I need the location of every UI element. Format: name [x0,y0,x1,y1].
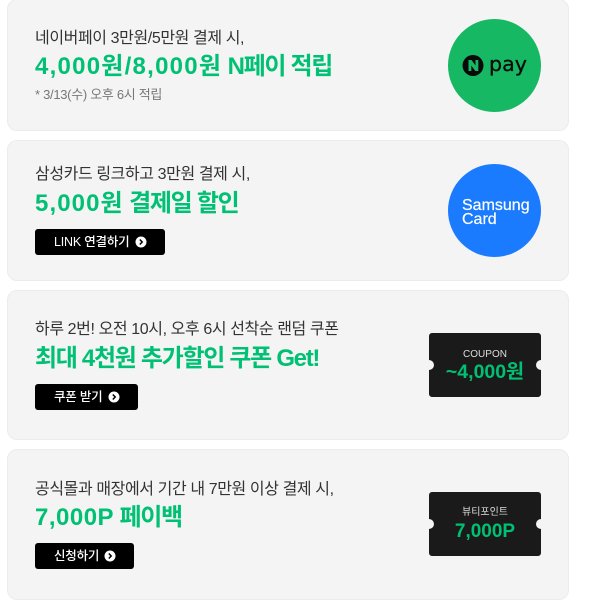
button: LINK connect: LINK 연결하기 [54,235,129,249]
icon: Samsung Card badge [448,164,541,257]
panel: Naver Pay card [7,0,569,131]
lead text: coupon condition: 하루 2번! 오전 10시, 오후 6시 선착순 랜덤 쿠폰 [35,321,339,338]
icon: coupon ticket [429,333,541,397]
icon: N pay badge: pay [489,52,527,76]
icon: Samsung Card badge: Samsung [462,197,530,214]
heading: payback reward: 7,000P 페이백 [35,504,182,531]
icon: beauty point ticket [429,492,541,556]
lead text: Samsung Card condition: 삼성카드 링크하고 3만원 결제 시, [35,166,250,183]
icon: coupon ticket: COUPON [463,349,507,360]
icon: Samsung Card badge: Card [462,211,497,228]
icon: beauty point ticket: 7,000P [455,521,515,542]
icon: N pay badge [448,19,541,112]
lead text: Naver Pay condition: 네이버페이 3만원/5만원 결제 시, [35,30,244,47]
note: accrual time: * 3/13(수) 오후 6시 적립 [35,87,162,102]
button: get coupon [35,384,138,410]
icon: beauty point ticket: 뷰티포인트 [462,506,508,518]
icon: coupon ticket: ~4,000원 [446,361,524,383]
panel: payback card [7,449,569,600]
heading: Samsung Card reward: 5,000원 결제일 할인 [35,190,238,217]
panel: coupon card [7,290,569,440]
button: LINK connect [35,229,165,255]
button: apply [35,543,134,569]
button: get coupon: 쿠폰 받기 [54,390,102,404]
panel: Samsung Card card [7,140,569,281]
heading: Naver Pay reward: 4,000원/8,000원 N페이 적립 [35,53,332,80]
button: apply: 신청하기 [54,549,99,563]
lead text: payback condition: 공식몰과 매장에서 기간 내 7만원 이상 결제 시, [35,481,334,498]
heading: coupon reward: 최대 4천원 추가할인 쿠폰 Get! [35,345,319,372]
